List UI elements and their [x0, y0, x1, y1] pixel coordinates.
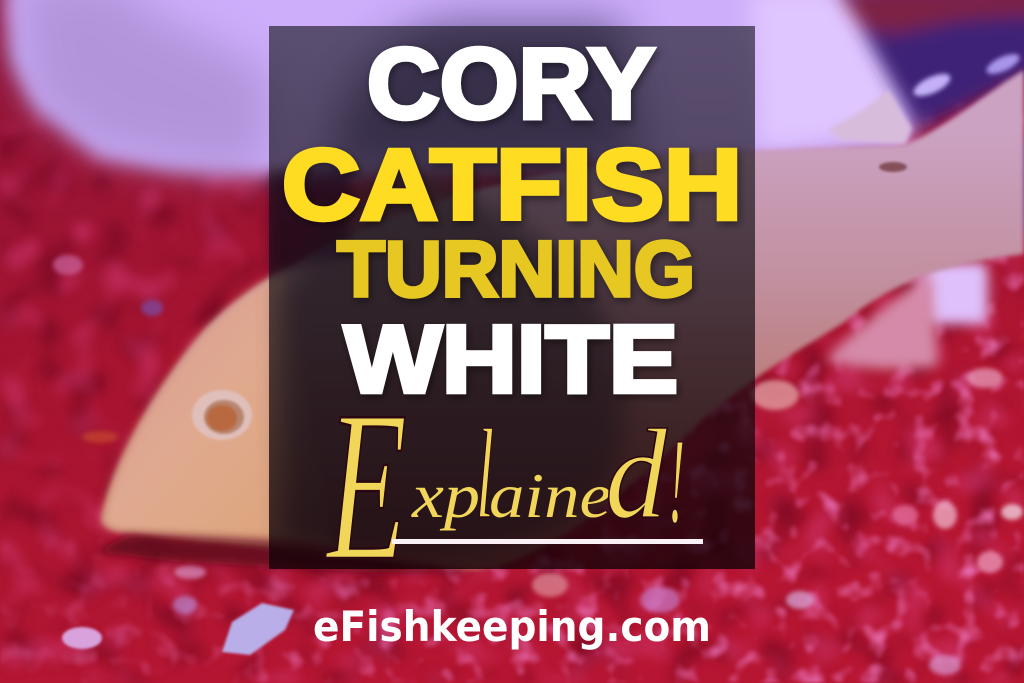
website url: eFishkeeping.com	[313, 602, 711, 651]
script word: Explained!: xp	[411, 460, 480, 531]
catfish body	[102, 70, 1024, 570]
gravel granules	[53, 255, 1023, 675]
pale crystal gravel piece	[222, 603, 294, 655]
catfish anal fin	[825, 272, 938, 369]
dark upper right corner	[838, 0, 1024, 130]
pale lilac tank wall	[6, 0, 925, 178]
title line: WHITE: WHITE	[344, 306, 678, 413]
script word: Explained!: d	[605, 403, 668, 545]
title: four stacked lines	[282, 28, 742, 413]
body spot	[879, 162, 907, 172]
snout shadow	[95, 535, 470, 572]
script word: Explained!	[325, 366, 685, 605]
script letter group: E	[325, 366, 407, 605]
title line: TURNING: TURNING	[337, 224, 695, 313]
white underline	[392, 539, 703, 544]
dark shadow at panel top	[330, 20, 640, 170]
title line: CATFISH: CATFISH	[282, 129, 742, 241]
dark lateral shading	[280, 175, 625, 554]
catfish head	[102, 270, 330, 540]
title line: CORY: CORY	[367, 28, 655, 140]
shaded left side of wall	[14, 0, 270, 168]
catfish dorsal fin	[828, 90, 912, 145]
pale patch under tail	[922, 262, 988, 324]
reflections in corner	[910, 50, 1022, 101]
text: !	[668, 414, 685, 549]
bright right side of wall	[750, 0, 915, 150]
script word: Explained!: aine	[489, 460, 611, 531]
dark translucent text panel	[269, 26, 755, 569]
script word: Explained!: l	[476, 403, 494, 545]
catfish tail fin	[1005, 135, 1024, 240]
dark gravel shadow by head	[270, 165, 350, 275]
eye	[192, 390, 252, 440]
